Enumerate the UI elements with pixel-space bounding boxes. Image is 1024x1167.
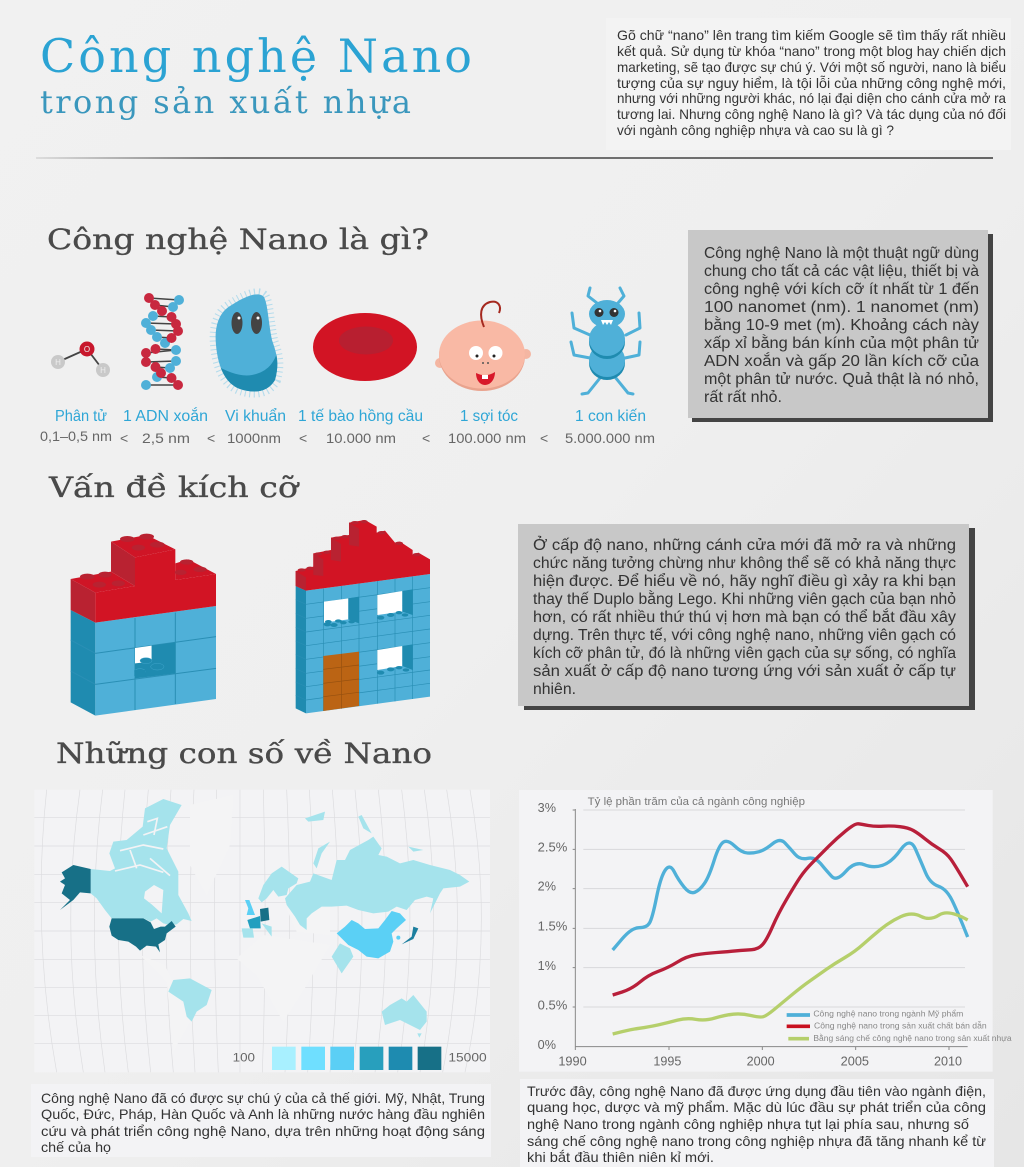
size values: 5.000.000 nm <box>565 430 655 446</box>
axis labels: 1990 <box>558 1055 587 1069</box>
size values: 100.000 nm <box>448 430 526 446</box>
panel: Duplo vs Lego explanation: sản xuất ở cấp độ nano tương ứng với sản xuất ở cấp tự <box>533 663 956 680</box>
intro text: tương lai. Nhưng công nghệ Nano là gì? Và tác dụng của nó đối <box>617 106 1006 122</box>
legend: 15000 <box>448 1051 487 1065</box>
header intro panel <box>606 18 1011 150</box>
panel: definition: một phân tử nước. Quả thật là nó nhỏ, <box>704 371 979 388</box>
United States <box>109 918 176 952</box>
panel: Duplo vs Lego explanation: hơn, có rất nhiều thứ thú vị hơn mà bạn có thể bắt đầu xây <box>533 609 956 626</box>
axis labels: 0.5% <box>538 998 567 1012</box>
axis labels: 1.5% <box>538 919 567 933</box>
illustration: Lego house <box>296 520 430 713</box>
United Kingdom <box>245 900 255 915</box>
intro text: marketing, sẽ tạo được sự chú ý. Với một số người, nano là biểu <box>617 59 1006 75</box>
Scandinavia <box>258 867 298 902</box>
chart title: Tỷ lệ phần trăm của cả ngành công nghiệp <box>588 796 805 808</box>
panel: Duplo vs Lego explanation <box>518 524 975 710</box>
title: Công nghệ Nano <box>40 29 472 83</box>
size labels: 1 ADN xoắn <box>123 406 208 425</box>
panel: definition: ADN xoắn và gấp 20 lần kích cỡ của <box>704 353 979 370</box>
icon: DNA <box>141 293 184 390</box>
icon: baby with hair <box>435 302 531 391</box>
panel: map caption: Công nghệ Nano đã có được sự chú ý của cả thế giới. Mỹ, Nhật, Trung <box>41 1090 485 1106</box>
axis labels: 3% <box>538 801 556 815</box>
panel: map caption <box>31 1084 491 1157</box>
title: trong sản xuất nhựa <box>40 83 411 121</box>
panel: chart caption: khi bắt đầu thiên niên kỉ mới. <box>527 1149 714 1165</box>
icon: bacterium <box>215 294 285 400</box>
size values: < <box>207 430 215 446</box>
axis labels: 2005 <box>841 1055 869 1069</box>
panel: chart caption: sáng chế công nghệ nano trong công nghiệp nhựa đã tăng nhanh kể từ <box>527 1133 986 1149</box>
panel: definition: công nghệ với kích cỡ ít nhất từ 1 đến <box>704 281 979 298</box>
panel: map caption: cứu và phát triển công nghệ Nano, dựa trên những hoạt động sáng <box>41 1123 485 1139</box>
panel: chart caption: nghệ Nano trong ngành công nghiệp nhựa tụt lại phía sau, nhưng số <box>527 1116 969 1132</box>
Russia <box>285 837 469 930</box>
chart legend: Công nghệ nano trong ngành Mỹ phẩm <box>813 1009 963 1019</box>
chart legend: Bằng sáng chế công nghệ nano trong sản xuất nhựa <box>813 1033 1012 1043</box>
intro text: với ngành công nghiệp nhựa và cao su là gì ? <box>617 122 894 138</box>
Japan <box>402 927 418 944</box>
icon: molecule: H <box>55 358 61 367</box>
axis labels: 2010 <box>934 1055 962 1069</box>
panel: Duplo vs Lego explanation: nhiên. <box>533 681 576 698</box>
heading: size matters: Vấn đề kích cỡ <box>48 471 301 504</box>
China <box>337 911 406 958</box>
size labels: 1 sợi tóc <box>460 408 518 425</box>
axis labels: 2.5% <box>538 840 567 854</box>
panel: definition: 100 nanomet (nm). 1 nanomet (nm) <box>704 299 979 316</box>
size labels: 1 con kiến <box>575 408 646 425</box>
panel: Duplo vs Lego explanation: hiện được. Để hiểu về nó, hãy nghĩ điều gì xảy ra khi bạn <box>533 573 956 590</box>
South Korea <box>396 936 400 940</box>
panel: Duplo vs Lego explanation: chức năng tưởng chừng như không thể sẽ có khả năng thực <box>533 555 956 572</box>
size values: < <box>422 430 430 446</box>
panel: Duplo vs Lego explanation: dựng. Trên thực tế, với công nghệ nano, những viên gạch có <box>533 627 956 644</box>
icon: ant <box>571 288 640 394</box>
series: cosmetics <box>613 841 968 950</box>
heading: nano in numbers: Những con số về Nano <box>56 737 432 770</box>
size labels: Phân tử <box>55 408 107 425</box>
countries without data <box>140 795 330 1052</box>
axis labels: 2% <box>538 880 556 894</box>
intro text: kết quả. Sử dụng từ khóa “nano” trong một blog hay chiến dịch <box>617 43 1006 59</box>
panel: definition: xấp xỉ bằng bán kính của một phân tử <box>704 335 979 352</box>
Brazil <box>168 978 212 1022</box>
panel: map caption: chế của họ <box>41 1139 111 1155</box>
panel: definition: rất rất nhỏ. <box>704 389 782 406</box>
chart legend <box>787 1009 1012 1043</box>
axis labels: 0% <box>538 1038 556 1052</box>
panel: map caption: Quốc, Đức, Pháp, Hàn Quốc và Anh là những nước hàng đầu nghiên <box>41 1106 485 1122</box>
panel: definition: Công nghệ Nano là một thuật ngữ dùng <box>704 245 979 262</box>
illustration: Duplo house <box>71 534 216 716</box>
size values: < <box>120 430 128 446</box>
size values: 0,1–0,5 nm <box>40 428 112 444</box>
panel: chart caption: quang học, dược và mỹ phẩm. Mặc dù lúc đầu sự phát triển của công <box>527 1099 986 1115</box>
Germany <box>260 908 269 922</box>
panel: chart caption <box>520 1079 994 1167</box>
panel: definition: chung cho tất cả các vật liệu, thiết bị và <box>704 263 979 280</box>
size labels: Vi khuẩn <box>225 407 286 425</box>
title <box>40 29 472 121</box>
chart legend: Công nghệ nano trong sản xuất chất bán dẫn <box>814 1021 987 1031</box>
line chart <box>519 790 1012 1072</box>
axis labels <box>538 801 962 1069</box>
panel: chart caption: Trước đây, công nghệ Nano đã được ứng dụng đầu tiên vào ngành điện, <box>527 1083 986 1099</box>
France <box>247 916 261 928</box>
axis labels: 2000 <box>747 1055 775 1069</box>
Arctic islands <box>305 812 423 868</box>
size labels: 1 tế bào hồng cầu <box>298 408 423 425</box>
world map <box>34 790 490 1072</box>
icon: molecule: O <box>84 345 90 354</box>
icon: molecule <box>51 342 110 377</box>
Canada <box>91 799 192 925</box>
panel: Duplo vs Lego explanation: thay thế Duplo bằng Lego. Khi những viên gạch của bạn nhỏ <box>533 591 956 608</box>
size values: 1000nm <box>227 430 281 446</box>
legend <box>233 1047 487 1070</box>
icon: red blood cell <box>313 313 417 381</box>
size values: 2,5 nm <box>142 430 190 446</box>
size values: < <box>299 430 307 446</box>
panel: definition <box>688 230 993 422</box>
intro text <box>617 27 1006 138</box>
heading: what is nano: Công nghệ Nano là gì? <box>47 223 429 256</box>
size values: 10.000 nm <box>326 430 396 446</box>
intro text: tượng của sự nguy hiểm, là tội lỗi của những công nghệ mới, <box>617 75 1006 91</box>
Italy <box>262 923 272 937</box>
size values: < <box>540 430 548 446</box>
size values <box>40 428 655 446</box>
panel: Duplo vs Lego explanation: kích cỡ phân tử, đó là những viên gạch của sự sống, có nghĩa <box>533 645 956 662</box>
series: plastics patents <box>613 913 968 1034</box>
intro text: Gõ chữ “nano” lên trang tìm kiếm Google sẽ tìm thấy rất nhiều <box>617 27 1006 43</box>
panel: Duplo vs Lego explanation: Ở cấp độ nano, những cánh cửa mới đã mở ra và những <box>533 536 956 554</box>
series: semiconductors <box>613 824 968 995</box>
Alaska <box>60 865 91 910</box>
size labels <box>55 406 646 425</box>
icon: molecule: H <box>100 366 106 375</box>
intro text: nhưng với những người khác, nó lại đại diện cho cánh cửa mở ra <box>617 90 1006 106</box>
legend: 100 <box>233 1051 255 1065</box>
Australia <box>382 995 427 1038</box>
axis labels: 1995 <box>653 1055 681 1069</box>
Spain <box>242 928 254 938</box>
panel: definition: bằng 10-9 met (m). Khoảng cách này <box>704 317 979 334</box>
axis labels: 1% <box>538 959 556 973</box>
India <box>332 943 353 973</box>
